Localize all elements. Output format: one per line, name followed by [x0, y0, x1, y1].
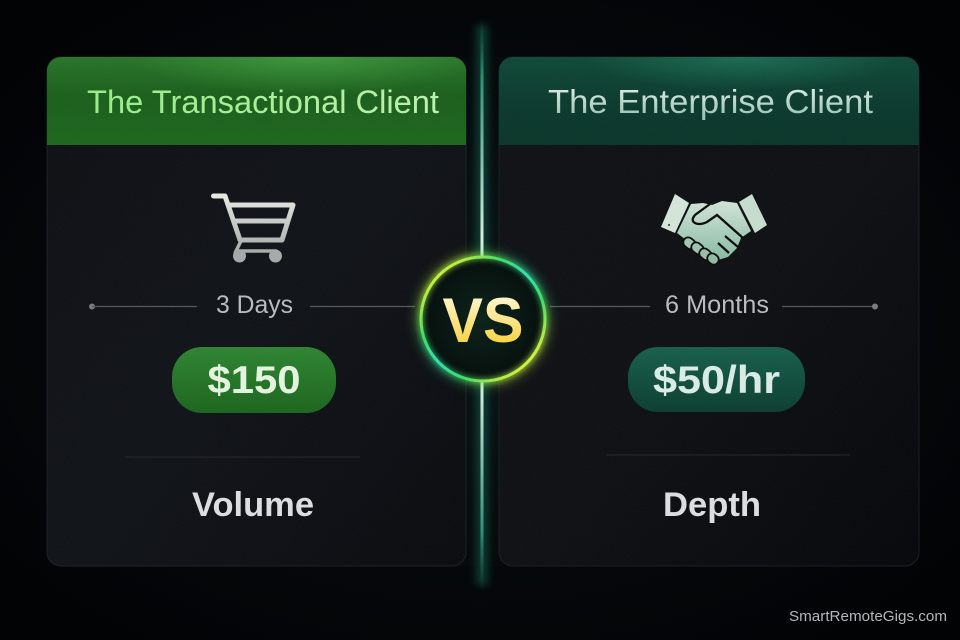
heading: The Enterprise Client: The Enterprise Client — [548, 83, 873, 120]
vs text: VS — [442, 286, 524, 356]
price pill: $150: $150 — [208, 359, 300, 402]
price pill: $50/hr: $50/hr — [653, 359, 780, 402]
center divider line — [476, 20, 488, 590]
price pill: $50/hr — [628, 347, 805, 412]
vs badge — [421, 257, 545, 381]
panel header: enterprise — [499, 57, 919, 145]
label: Volume: Volume — [192, 486, 314, 524]
timeline: 6 Months: 6 Months — [665, 291, 769, 319]
timeline: 6 Months — [550, 291, 878, 319]
panel: transactional client — [47, 57, 466, 566]
label: Depth: Depth — [663, 486, 761, 524]
panel header: transactional — [47, 57, 466, 145]
timeline: 3 Days — [89, 291, 415, 319]
heading: The Transactional Client: The Transactional Client — [87, 84, 439, 120]
timeline: 3 Days: 3 Days — [216, 291, 293, 319]
panel: enterprise client — [499, 57, 919, 566]
icon: handshake — [661, 194, 767, 267]
watermark: SmartRemoteGigs.com — [789, 609, 947, 625]
price pill: $150 — [172, 347, 336, 413]
icon: shopping cart — [214, 196, 293, 262]
